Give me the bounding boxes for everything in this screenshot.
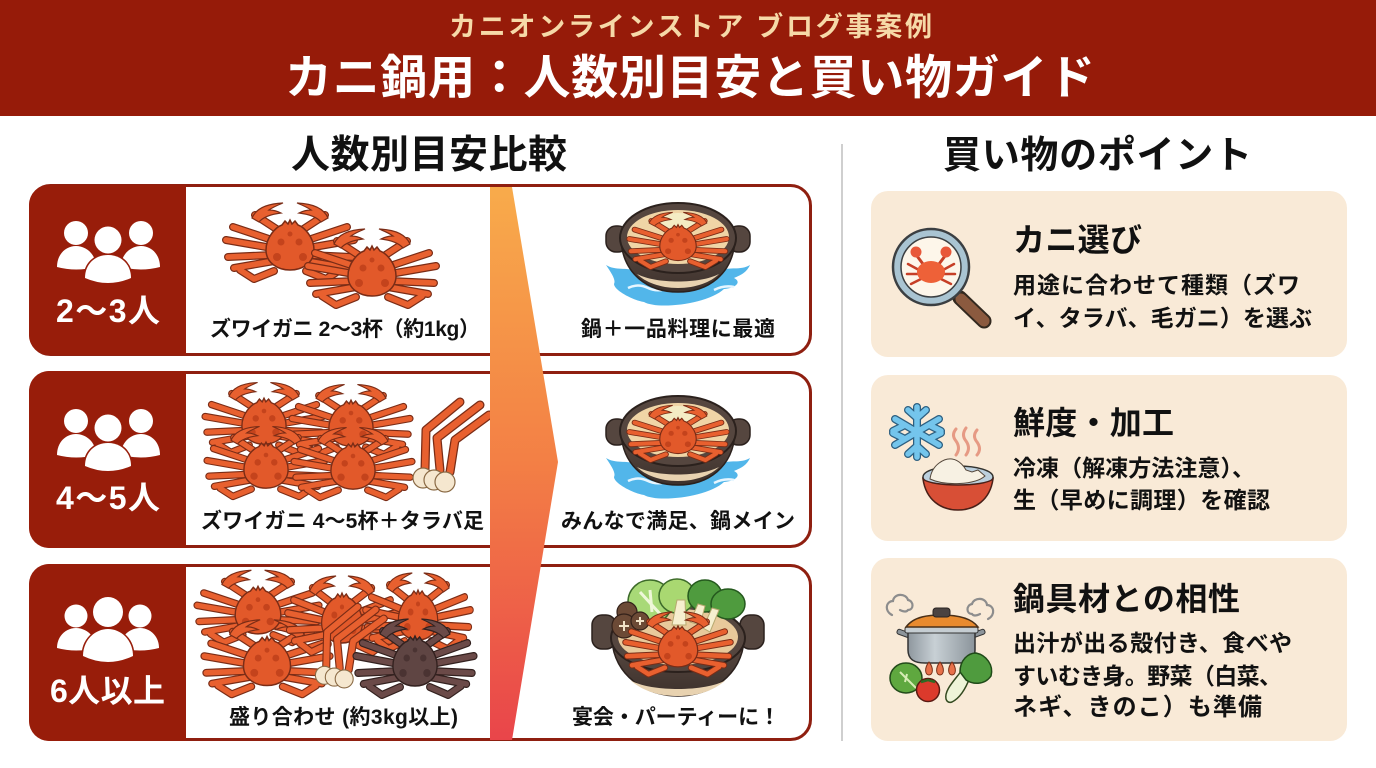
arrow: scale gradient (490, 187, 558, 740)
label: crab quantity: ズワイガニ 2〜3杯（約1kg） (210, 317, 480, 341)
header subtitle: カニオンラインストア ブログ事案例 (449, 11, 932, 42)
badge label: 2〜3人 (56, 293, 160, 329)
icon: pot and vegetables (887, 595, 993, 702)
people badge: 4-5 (29, 371, 186, 548)
label: crab quantity: ズワイガニ 4〜5杯＋タラバ足 (201, 509, 484, 533)
panel: row 6+ people (29, 564, 810, 741)
card text: すいむき身。野菜（白菜、 (1013, 663, 1282, 689)
illustration: crab hotpot (606, 203, 750, 306)
card text (1013, 455, 1270, 513)
panel: crab selection (871, 191, 1347, 357)
card text: イ、タラバ、毛ガニ）を選ぶ (1013, 305, 1312, 331)
panel: freshness and processing (871, 375, 1347, 541)
people badge: 6+ (29, 564, 186, 741)
label: usage: 宴会・パーティーに！ (572, 706, 780, 729)
icon: people (57, 409, 160, 471)
card text (1013, 630, 1292, 721)
card title: カニ選び (1013, 222, 1142, 258)
illustration: crab hotpot (606, 396, 750, 499)
illustration: assorted crabs (197, 570, 474, 695)
icon: people (57, 597, 159, 662)
panel: row 2-3 people (29, 185, 810, 355)
people badge: 2-3 (29, 185, 186, 355)
card text: 冷凍（解凍方法注意）、 (1013, 455, 1255, 481)
card title: 鍋具材との相性 (1013, 581, 1240, 617)
panel: hotpot ingredients (871, 558, 1347, 741)
heading: shopping points: 買い物のポイント (943, 135, 1252, 177)
icon: snowflake and bowl (893, 407, 993, 510)
icon: people (57, 221, 160, 283)
card text (1013, 272, 1312, 331)
label: crab quantity: 盛り合わせ (約3kg以上) (229, 706, 458, 729)
badge label: 6人以上 (50, 673, 165, 709)
icon: magnifier with crab (893, 229, 984, 321)
main title: カニ鍋用：人数別目安と買い物ガイド (285, 51, 1095, 104)
illustration: two snow crabs (226, 203, 436, 305)
card text: 生（早めに調理）を確認 (1013, 487, 1270, 513)
panel: row 4-5 people (29, 371, 810, 548)
illustration: loaded hotpot (592, 579, 764, 696)
label: usage: みんなで満足、鍋メイン (561, 510, 795, 533)
column divider (841, 144, 843, 741)
card text: ネギ、きのこ）も準備 (1013, 694, 1262, 721)
label: usage: 鍋＋一品料理に最適 (581, 318, 775, 341)
heading: comparison section: 人数別目安比較 (291, 134, 567, 177)
card text: 用途に合わせて種類（ズワ (1013, 272, 1300, 298)
card title: 鮮度・加工 (1013, 405, 1174, 441)
card text: 出汁が出る殻付き、食べや (1013, 630, 1292, 656)
badge label: 4〜5人 (56, 480, 160, 516)
illustration: four snow crabs and king crab legs (205, 383, 489, 497)
header banner (0, 0, 1376, 116)
